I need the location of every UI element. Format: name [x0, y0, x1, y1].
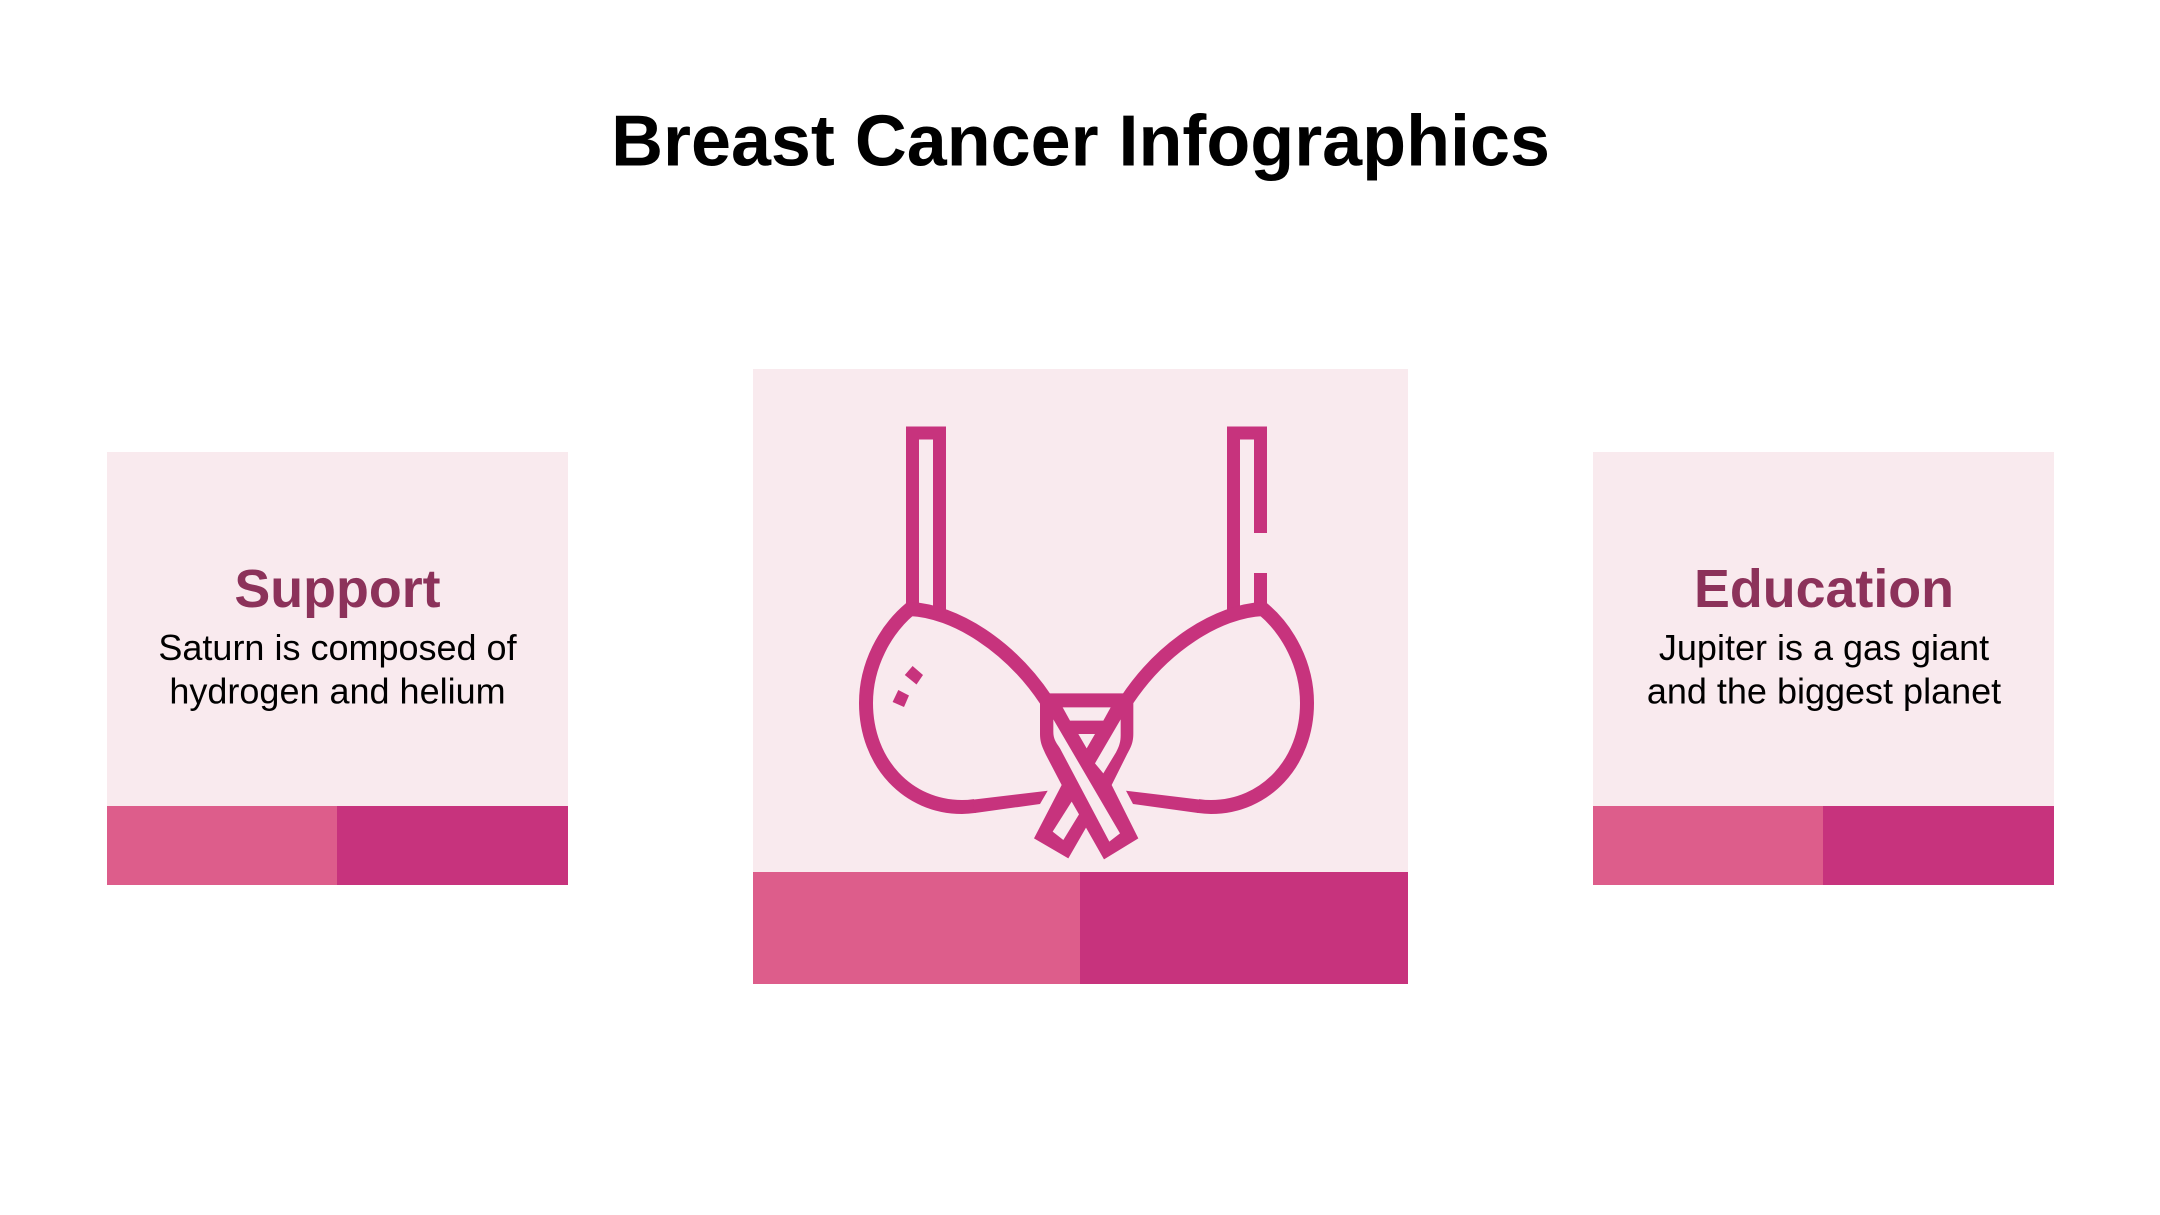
education heading: Education [1694, 559, 1954, 619]
left cup [866, 609, 1046, 807]
left cup lower band [972, 791, 1048, 813]
education colour bar light [1593, 806, 1823, 885]
education description: Jupiter is a gas giant [1659, 627, 1989, 668]
support colour bar dark [337, 806, 568, 885]
awareness ribbon [1034, 693, 1138, 859]
left strap [912, 433, 940, 610]
right cup lower band [1126, 791, 1201, 813]
center colour bar light [753, 872, 1080, 984]
panel: education [1593, 452, 2054, 885]
education colour bar dark [1823, 806, 2054, 885]
right cup [1127, 609, 1307, 807]
support description: hydrogen and helium [169, 670, 506, 712]
highlight marks [893, 666, 923, 707]
support heading: Support [234, 559, 441, 619]
icon: bra with awareness ribbon [866, 433, 1307, 859]
education description: and the biggest planet [1647, 670, 2001, 712]
panel: center icon [753, 369, 1408, 984]
support description: Saturn is composed of [158, 627, 518, 668]
panel: support [107, 452, 568, 885]
center colour bar dark [1080, 872, 1408, 984]
support colour bar light [107, 806, 337, 885]
title: Breast Cancer Infographics [611, 102, 1550, 182]
right strap [1234, 433, 1260, 610]
